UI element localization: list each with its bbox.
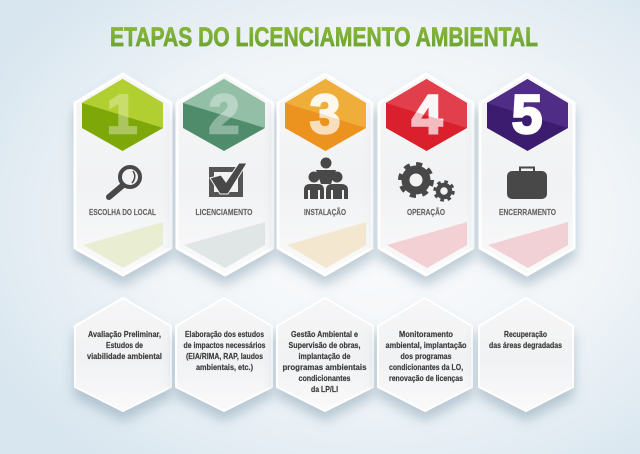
text block 4: renovação de licenças [389,373,463,383]
number 3: 3 [310,83,340,145]
number 2: 2 [209,83,239,145]
text block 2: de impactos necessários [184,340,266,350]
number 3 [310,93,340,135]
text block 3: condicionantes [298,373,351,383]
label: instalacao: INSTALAÇÃO [304,207,346,217]
panel: description 1 [75,298,171,411]
text block 3: da LP/LI [311,384,338,394]
text block 4: ambiental, implantação [386,340,466,350]
panel: step 4 [379,74,473,275]
hexagon card 2 [176,298,272,411]
hexagon 5 [487,79,568,151]
text block 3: Supervisão de obras, [288,340,360,350]
hexagon card 5 [479,298,573,411]
icon: checkbox [209,163,247,197]
colored wedge 2 [184,222,265,268]
text block 2: Elaboração dos estudos [185,329,264,339]
label: encerramento: ENCERRAMENTO [499,207,556,217]
number 2 [209,93,238,134]
card 5 [480,74,574,275]
hexagon 4 [386,79,467,151]
hexagon card 1 [75,298,171,411]
card 4 [379,74,473,275]
hexagon card 3 [277,298,373,411]
text block 4: dos programas [400,351,452,361]
panel: step 5 [480,74,574,275]
text block 1 [87,329,162,361]
colored wedge 1 [83,222,163,268]
hexagon 2 [183,79,265,151]
card 2 [177,74,273,275]
card 3 [278,74,372,275]
text block 3 [282,329,367,394]
panel: step 2 [177,74,273,275]
hexagon 3 [285,79,366,151]
colored wedge 5 [488,222,568,268]
text block 5: Recuperação [504,329,547,339]
text block 5 [489,329,562,350]
text block 4 [386,329,466,383]
number 4: 4 [412,83,443,145]
text block 1: Avaliação Preliminar, [88,329,161,339]
number 1 [108,94,138,134]
panel: description 2 [176,298,272,411]
panel: step 3 [278,74,372,275]
text block 1: Estudos de [106,340,143,350]
text block 2: ambientais, etc.) [196,362,253,372]
hexagon card 4 [378,298,472,411]
number 4 [411,94,444,134]
number 5: 5 [512,83,542,145]
text block 2 [184,329,266,372]
icon: briefcase [507,168,547,199]
panel: description 4 [378,298,472,411]
panel: step 1 [75,74,171,275]
number 1: 1 [107,83,137,145]
text block 4: condicionantes da LO, [389,362,463,372]
icon: gears [400,164,453,200]
panel: description 5 [479,298,573,411]
panel: description 3 [277,298,373,411]
text block 3: programas ambientais [282,362,367,372]
label: licenciamento: LICENCIAMENTO [196,207,253,217]
label: escolha do local: ESCOLHA DO LOCAL [89,207,156,217]
number 2: 2 [209,83,239,145]
icon: magnifier [109,167,140,197]
text block 1: viabilidade ambiental [87,351,162,361]
text block 4: Monitoramento [399,329,453,339]
number 1: 1 [107,83,137,145]
number 3: 3 [310,83,340,145]
colored wedge 3 [287,222,366,268]
label: operacao: OPERAÇÃO [407,207,445,217]
text block 2: (EIA/RIMA, RAP, laudos [186,351,263,361]
number 4: 4 [412,83,443,145]
text block 3: Gestão Ambiental e [291,329,358,339]
text block 5: das áreas degradadas [489,340,562,350]
hexagon 1 [82,79,163,151]
card 1 [75,74,171,275]
text block 3: implantação de [298,351,351,361]
colored wedge 4 [387,222,467,268]
icon: people [304,158,348,199]
